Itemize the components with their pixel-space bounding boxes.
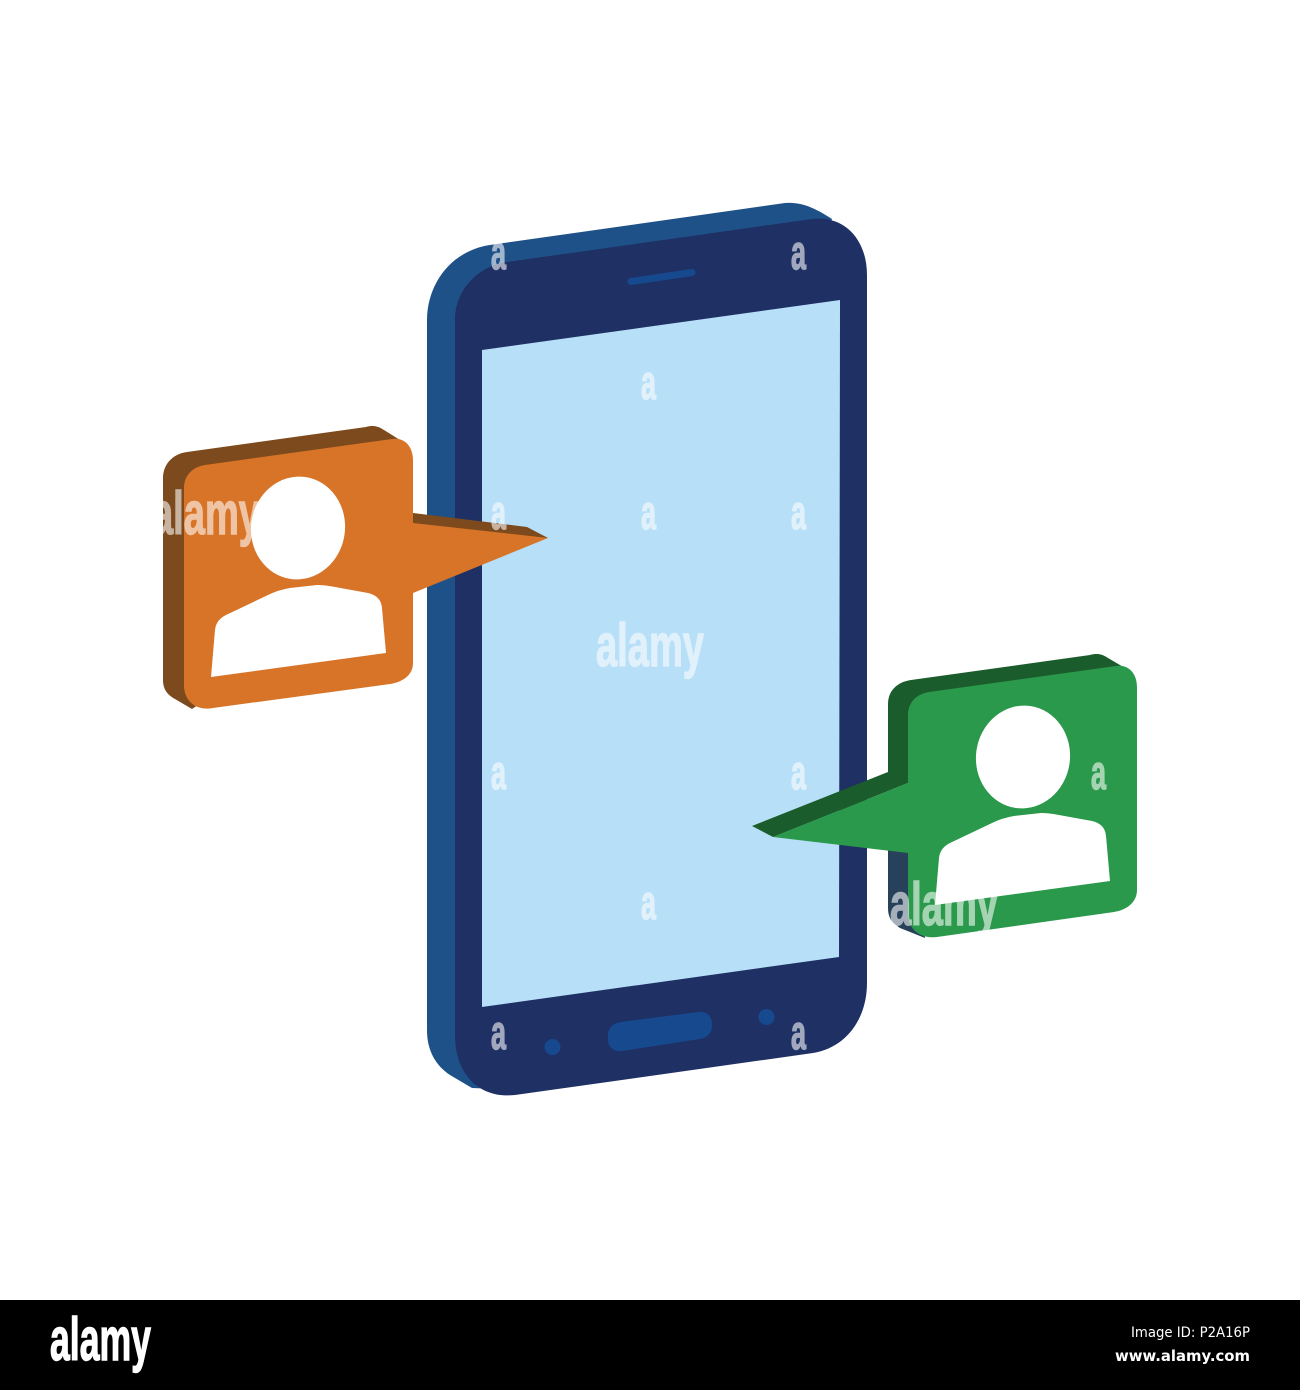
watermark text: alamy [890,871,998,938]
person shoulders [211,585,386,677]
watermark text: a [791,1007,806,1060]
image id: Image ID: P2A16P [1131,1325,1250,1341]
watermark text: a [791,227,806,280]
green bubble side [752,654,1125,837]
watermark text: a [641,357,656,410]
orange bubble side [163,426,548,709]
icon: orange speech bubble with person [163,426,548,709]
phone home button [608,1012,712,1051]
watermark text: a [491,747,506,800]
watermark text: a [491,227,506,280]
watermark text: a [491,1007,506,1060]
watermark text [152,227,1106,1060]
website: www.alamy.com [1115,1347,1250,1365]
phone right dot [758,1009,774,1025]
orange bubble front [184,439,548,709]
person head [969,699,1077,815]
icon: smartphone [427,203,867,1095]
green bubble front [773,666,1137,937]
phone screen [482,300,840,1007]
watermark text: a [641,487,656,540]
watermark text: a [1091,747,1106,800]
icon: green speech bubble with person [752,654,1137,938]
watermark text: a [791,487,806,540]
watermark text: a [791,747,806,800]
watermark text: a [641,877,656,930]
phone speaker [631,272,692,282]
footer bar [0,1300,1300,1390]
watermark text: a [491,487,506,540]
green bubble lower side [888,850,925,938]
watermark text: alamy [596,612,704,679]
person shoulders [935,813,1110,905]
phone left dot [544,1039,560,1055]
person head [244,470,352,586]
footer logo: alamy [50,1306,151,1373]
watermark text: alamy [152,480,260,547]
phone front body [455,219,867,1095]
phone side edge [427,203,832,1090]
